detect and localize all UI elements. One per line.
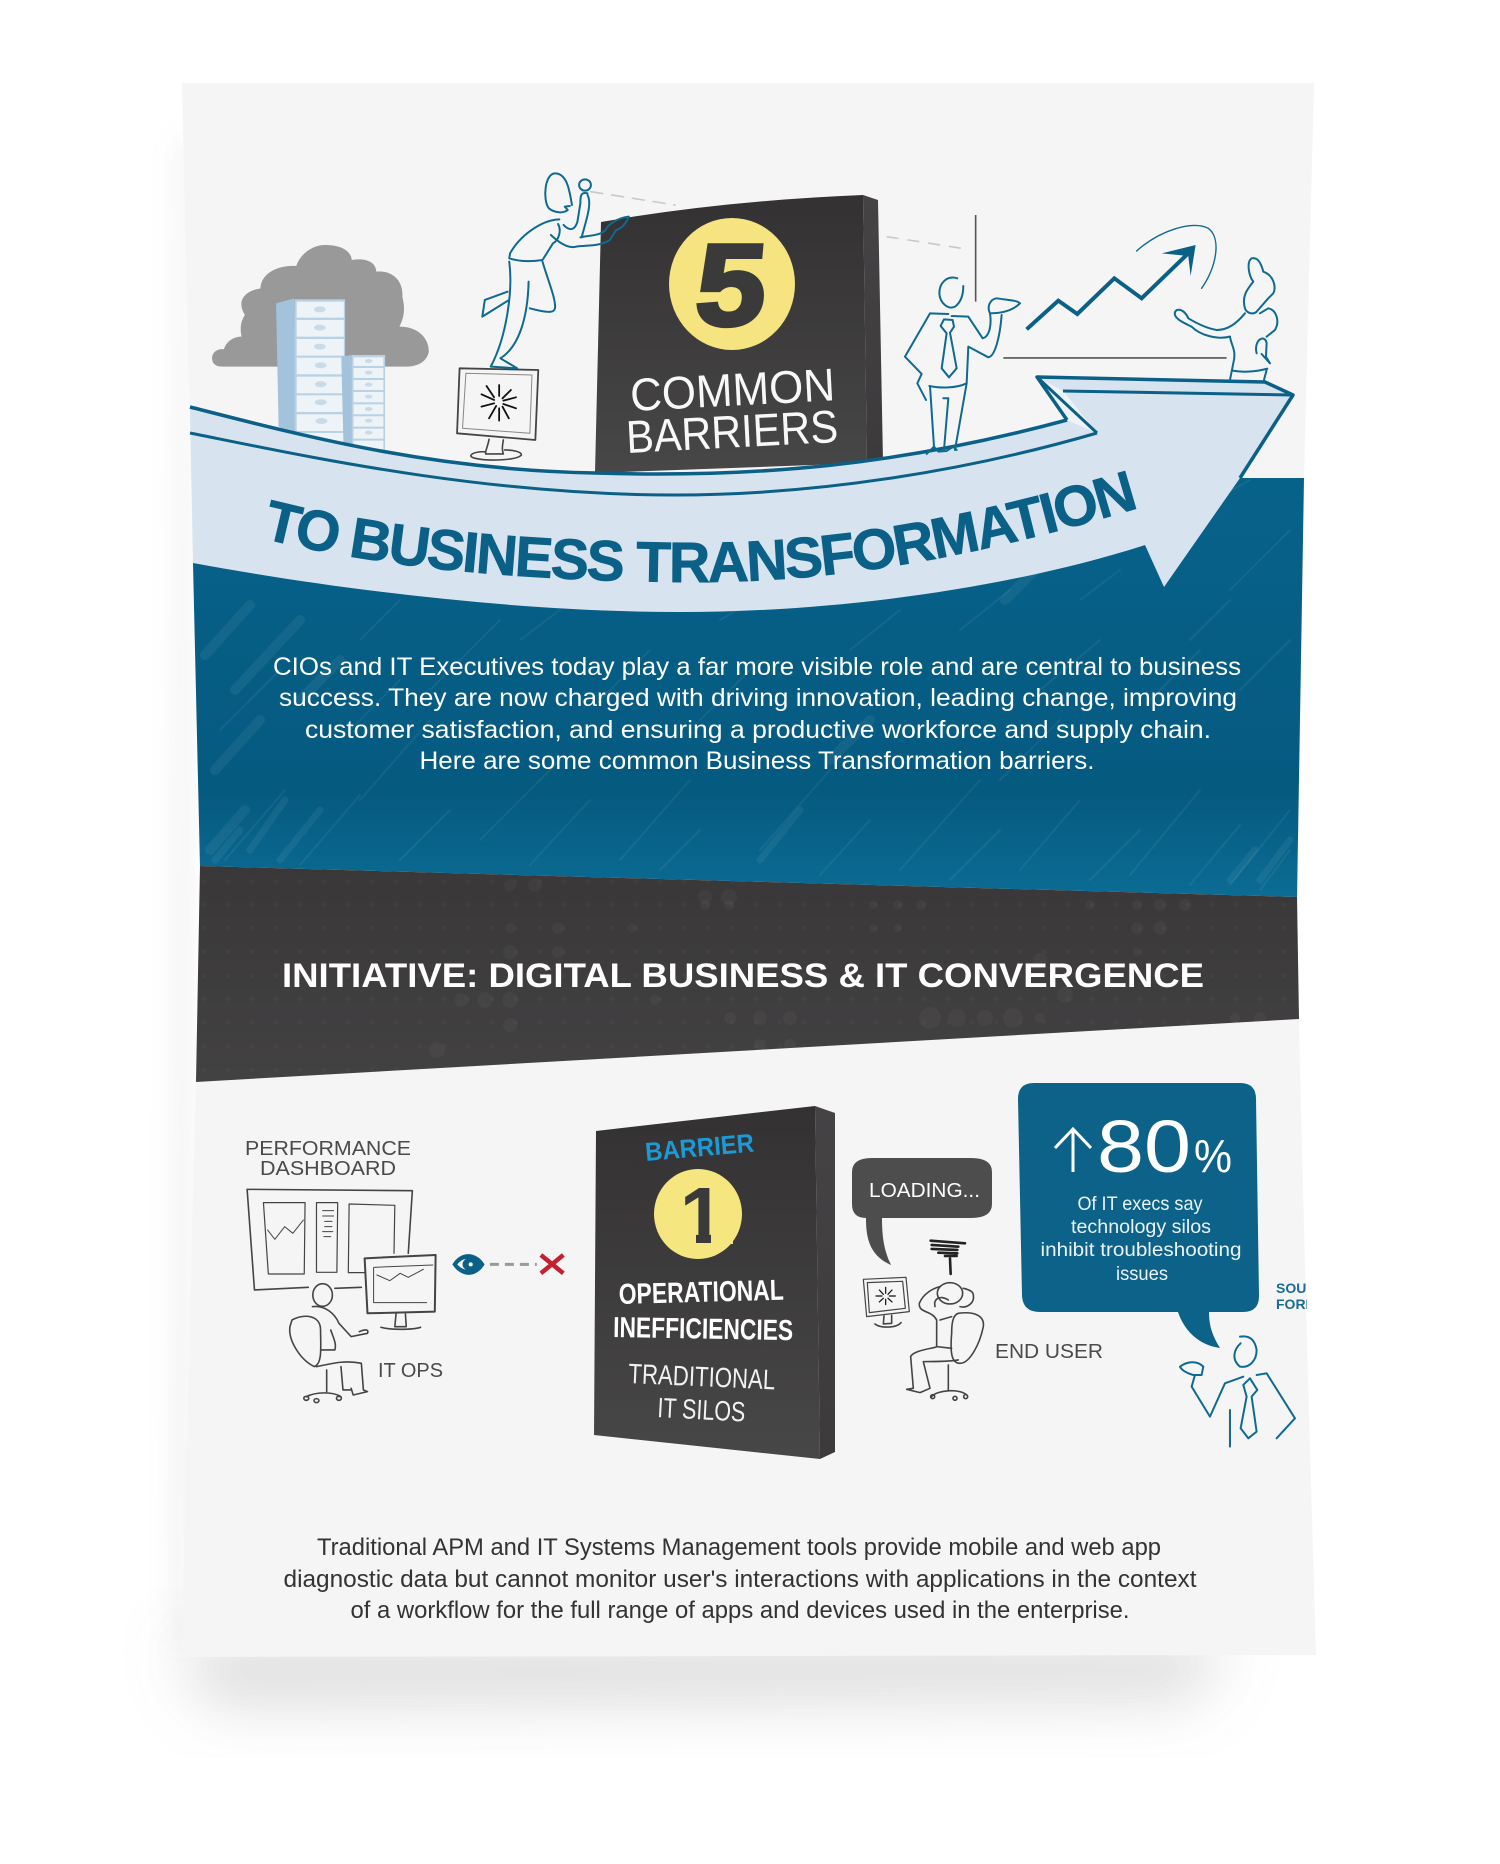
stat description: technology silos	[1071, 1216, 1211, 1238]
book: barrier 1	[594, 1106, 835, 1459]
common barriers label: COMMON	[629, 358, 836, 421]
80 percent figure	[1097, 1105, 1232, 1188]
loading speech bubble	[852, 1158, 992, 1265]
source note clipped at paper edge: FORRESTER	[1276, 1296, 1362, 1312]
closing paragraph	[284, 1534, 1197, 1624]
barrier subtitle: IT SILOS	[657, 1392, 746, 1428]
stat description: Of IT execs say	[1078, 1193, 1203, 1215]
stat speech bubble: 80%	[1018, 1083, 1259, 1348]
intro paragraph: success. They are now charged with driving innovation, leading change, improving	[279, 684, 1237, 712]
source note clipped at paper edge: SOURCE:	[1276, 1280, 1341, 1296]
illustration: woman climbing	[482, 173, 675, 368]
yellow circle 1	[654, 1169, 742, 1260]
loading speech bubble: LOADING...	[869, 1180, 980, 1202]
closing paragraph: diagnostic data but cannot monitor user's interactions with applications in the context	[284, 1566, 1197, 1593]
performance dashboard label: PERFORMANCE	[245, 1137, 411, 1160]
performance dashboard label: DASHBOARD	[260, 1157, 396, 1180]
end user label: END USER	[995, 1341, 1103, 1363]
ribbon title: TO BUSINESS TRANSFORMATION	[270, 470, 1136, 583]
stat description	[1040, 1193, 1242, 1285]
barrier title	[613, 1275, 793, 1347]
it ops label: IT OPS	[378, 1360, 443, 1382]
performance dashboard label	[245, 1137, 411, 1180]
yellow circle 5: 5	[691, 220, 772, 350]
ribbon arrow	[190, 375, 1295, 612]
barrier subtitle: TRADITIONAL	[628, 1358, 776, 1395]
barrier subtitle	[628, 1358, 776, 1428]
80 percent figure: 80	[1097, 1105, 1191, 1188]
barrier label: BARRIER	[644, 1128, 755, 1167]
80 percent figure: %	[1194, 1130, 1232, 1182]
barrier title: OPERATIONAL	[618, 1275, 784, 1311]
illustration: end user with monitor	[863, 1241, 983, 1400]
icon: loading monitor under climber	[457, 368, 538, 460]
common barriers label	[625, 358, 839, 463]
yellow circle 5	[669, 218, 795, 350]
intro paragraph: CIOs and IT Executives today play a far more visible role and are central to business	[273, 653, 1241, 681]
paper shadow	[174, 140, 1230, 1705]
yellow circle 1: 1	[680, 1171, 724, 1260]
closing paragraph: Traditional APM and IT Systems Management tools provide mobile and web app	[317, 1534, 1161, 1561]
section heading: INITIATIVE: DIGITAL BUSINESS & IT CONVERGENCE	[282, 957, 1204, 995]
barrier title: INEFFICIENCIES	[613, 1312, 793, 1347]
illustration: presenter man, woman and growth chart	[887, 215, 1277, 454]
illustration: executive speaking	[1180, 1336, 1295, 1447]
source note clipped at paper edge	[1276, 1284, 1307, 1309]
intro paragraph: Here are some common Business Transformation barriers.	[420, 747, 1094, 775]
illustration: IT ops at dashboard	[247, 1189, 436, 1403]
infographic poster	[168, 83, 1316, 1726]
closing paragraph: of a workflow for the full range of apps and devices used in the enterprise.	[350, 1597, 1130, 1624]
stat description: inhibit troubleshooting	[1040, 1239, 1242, 1261]
paper sheet	[182, 83, 1316, 1657]
icon: cloud with server towers	[212, 245, 429, 452]
intro paragraph: customer satisfaction, and ensuring a productive workforce and supply chain.	[305, 716, 1211, 744]
intro paragraph	[273, 653, 1241, 775]
book: 5 common barriers	[595, 195, 883, 473]
common barriers label: BARRIERS	[625, 400, 839, 463]
icon: up arrow	[1055, 1129, 1091, 1172]
stat description: issues	[1116, 1263, 1168, 1285]
dark initiative band	[196, 866, 1299, 1082]
blue intro panel	[193, 478, 1304, 897]
icon: eye, dashed line and red cross	[452, 1254, 563, 1275]
